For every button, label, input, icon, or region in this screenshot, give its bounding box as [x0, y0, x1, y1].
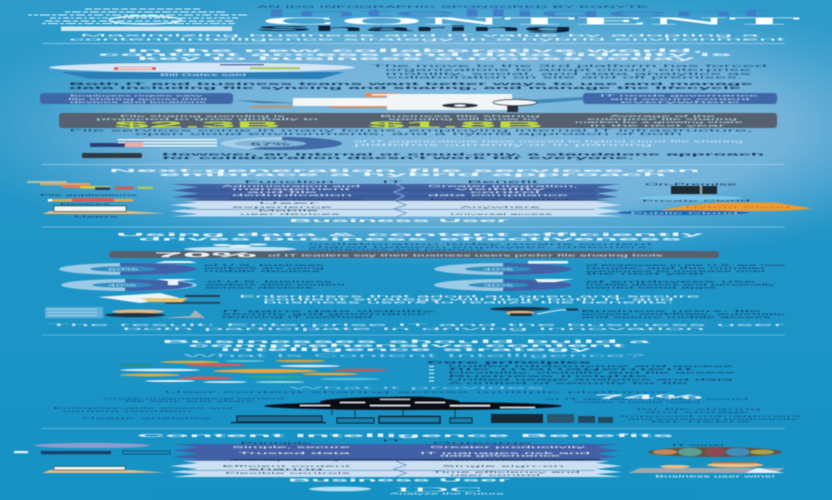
callout: left: Employees require easy [70, 94, 205, 98]
donut: 60%: workers are using [204, 266, 327, 270]
icon: private cloud: Private Cloud [642, 198, 752, 202]
heading: comprehensive content [188, 343, 629, 348]
paragraph: chart note [354, 140, 744, 147]
text block: right provides [546, 397, 803, 424]
subheading: what is content intelligence: What Is Content Intelligence? [183, 353, 649, 358]
paragraph: file services: File services come in many forms, employing internal IT infrastructure, [69, 128, 753, 132]
icon: file applications: File applications [40, 193, 139, 197]
sponsor line: AN IDG INFOGRAPHIC SPONSORED BY EGNYTE [257, 5, 651, 9]
table header: Outcome [432, 441, 535, 445]
table rows: User [258, 201, 319, 205]
donut: 60% [59, 261, 328, 275]
stat: market share text [575, 114, 746, 128]
title: Sharing: Sharing [255, 26, 575, 33]
table header [240, 438, 535, 445]
text block: right provides: of IT decision-makers would [546, 397, 751, 401]
stat: 1.8B: Business file sharing [380, 114, 543, 118]
heading: In the new collaborative world, [127, 48, 703, 53]
table rows: Transparency [230, 458, 346, 462]
stat: market share text: in the next year [590, 124, 726, 128]
paragraph: business benefit: access, workflows, automatic [581, 312, 788, 316]
heading: drives business effectiveness [138, 236, 686, 242]
text block: left provides: Enterprise-wide access and [53, 406, 236, 410]
heading: key to business success today [137, 56, 699, 61]
paragraph: enterprises [239, 294, 701, 304]
icon: devices: Devices [60, 202, 113, 206]
icon: private cloud [638, 196, 752, 202]
label: business user: Business User [288, 478, 512, 482]
heading [109, 168, 702, 177]
paragraph: both IT and business [69, 82, 753, 90]
stat: 1.8B [368, 114, 546, 130]
icon: on-premise server [645, 182, 738, 194]
icon: phone [82, 153, 142, 158]
paragraph: both IT and business: data including file syncing and sharing, and manage the lifecycle [69, 86, 741, 90]
icon: file applications [27, 181, 153, 197]
illustration: documents, gears, magnifier [233, 93, 583, 112]
table rows: visibility [455, 187, 551, 191]
icon: IT worker at monitor [45, 307, 205, 318]
table rows: experience [232, 205, 336, 209]
paragraph: chart note: platforms currently or in planning [354, 143, 653, 147]
paragraph: business benefit [581, 309, 788, 319]
paragraph: collaboration today: Collaboration today means content [308, 242, 653, 246]
paragraph: file services: open cloud environments, and a hybrid approach of both [135, 132, 683, 136]
list: core principles: Business insights [448, 374, 654, 378]
donut: 30%: of employees use [586, 280, 760, 284]
paragraph: IT benefit: IT gains data visibility, [222, 309, 440, 313]
table rows: user devices [240, 212, 344, 216]
table rows: Anywhere [460, 205, 543, 209]
paragraph: however: for collaboration doesn't work for everyone. [162, 156, 635, 160]
icon: hand with tablet (users) [42, 206, 165, 218]
table rows: management [232, 187, 352, 191]
donut: 30%: owned cloud apps [586, 286, 720, 290]
donut chart: 57% [221, 137, 342, 150]
list: core principles: Core principles [427, 360, 593, 364]
text block: right provides: choose a hybrid model [574, 400, 702, 404]
section: next generation [27, 168, 812, 223]
right illustration: business user wins: Business user wins! [655, 474, 775, 478]
text block: left provides: file sync and share [125, 399, 258, 403]
stat: 2.3B: projected to grow globally to [96, 117, 321, 121]
subtitle [69, 32, 792, 42]
text block: left provides: content retention [62, 409, 196, 413]
icon: paper and hands [98, 293, 220, 304]
paragraph: however: However, an internal or cloud-only, a standalone approach [162, 152, 764, 156]
table header: IT [382, 180, 403, 184]
subtitle: Maximizing business and IT value by adopting a [80, 32, 766, 38]
table rows: Simple, secure [232, 445, 353, 449]
table rows: Time efficiency and [432, 470, 583, 474]
table header: IT [382, 438, 404, 442]
paragraph: collaboration today [308, 242, 653, 252]
heading: Next-generation file services can [109, 168, 702, 173]
paragraph: 3rd platform [371, 64, 768, 80]
stat bar: 70%: 70% [154, 252, 259, 259]
heading: Businesses should build a [162, 339, 654, 344]
heading: content access and data fidelity is [98, 52, 736, 57]
subheading: user content sharing: User content sharing across multiple platforms [164, 390, 672, 394]
table: file services [170, 180, 622, 217]
section: using data [45, 232, 791, 331]
table header: Principle [240, 441, 314, 445]
illustration: disc with logos [49, 63, 355, 79]
heading [116, 232, 707, 242]
text block: right provides: Improved management [620, 414, 803, 418]
footer source text: Sources: IDG Research Services, IDC, Enterprise file sync and share market forecast and analysis for business [151, 494, 703, 498]
stats bar [59, 113, 777, 130]
icon: hybrid cloud: Hybrid Cloud [685, 205, 792, 209]
stat: 2.3B: File sharing spending is [120, 114, 288, 118]
text block: left provides: Usage analytics [82, 416, 217, 420]
right illustration: IT wins brain: IT wins! [672, 443, 725, 447]
table rows: Mobile [258, 208, 322, 212]
paragraph: IT benefit: security and governance, [222, 312, 433, 316]
callout: right [583, 93, 777, 104]
footer logo: IDC: Analyze the Future [390, 492, 508, 496]
table rows: and file [247, 190, 321, 194]
table rows [222, 184, 582, 216]
quote: result: both participate in driving innovation [122, 326, 705, 331]
paragraph: enterprises: Enterprises that adopt an open and secure [239, 294, 701, 298]
stat: 74%: 74% [594, 394, 705, 401]
paragraph: 3rd platform: organizations to adopt cloud, enterprise [385, 68, 752, 72]
heading [162, 339, 654, 352]
table header: Function [244, 180, 336, 184]
table rows: Universal access [450, 212, 555, 216]
donut: 30%: mobile devices and personally [586, 282, 778, 286]
paragraph: business benefit: Business users: file [581, 309, 764, 313]
callout: right: everywhere [620, 100, 744, 104]
subtitle: content intelligence strategy in a hybrid environment [69, 36, 792, 42]
callout: left: file sharing across their [68, 97, 208, 101]
donut: 60%: mobile devices [204, 269, 324, 273]
heading: Using data & content efficiently [116, 232, 707, 237]
list: core principles [427, 360, 740, 385]
right illustration: business user wins [628, 462, 785, 478]
list: core principles: A unified of security for file [448, 381, 692, 385]
stat: 1.8B: $1.8B [368, 120, 546, 130]
icon: public cloud: Public Cloud [630, 211, 741, 215]
stat: market share text: enterprise file sharing [587, 117, 740, 121]
stat bar: 70%: of IT leaders say their business users prefer file sharing tools [268, 254, 664, 258]
callout: right: and secure content [610, 97, 751, 101]
donut: 40%: the next year [586, 272, 707, 276]
label: business user: Business User [289, 218, 511, 223]
right illustration: IT wins brain [648, 443, 782, 457]
donut: 40% US business: of U.S. business [207, 280, 336, 284]
table rows: Trusted data [238, 451, 354, 455]
icon: devices [48, 198, 133, 206]
donut: 40%: continues to increase over [586, 269, 767, 273]
header [28, 5, 801, 42]
donut: 40% US business [61, 279, 346, 291]
table rows: IT manages risk and [420, 451, 593, 455]
illustration: black cloud with devices [231, 396, 613, 423]
table rows: deduplication [232, 193, 356, 197]
table rows: data governance [440, 454, 563, 458]
heading: Content Intelligence Benefits [137, 433, 677, 439]
paragraph: business benefit: and secure mobile access [581, 315, 774, 319]
quote: result [48, 322, 791, 331]
donut: 40% US business: 40% [108, 284, 137, 288]
donut: 60%: 60% [108, 268, 139, 272]
left icons: IT [14, 443, 170, 454]
icon: server bars [90, 139, 217, 147]
paragraph: file services [69, 128, 753, 136]
donut: 30% [434, 279, 778, 291]
table rows: Greater integration, [428, 184, 580, 188]
section: benefits [14, 433, 785, 482]
paragraph: IT benefit [222, 309, 440, 319]
left icon: hand with tablet [42, 466, 165, 473]
table rows: control [470, 190, 543, 194]
paragraph: collaboration today: shared between employees, customers, [308, 245, 653, 249]
illustration: disc with logos: Bill Gates said [160, 73, 247, 77]
footer logo: IDC: IDC [395, 488, 483, 494]
text block: left provides [53, 396, 285, 420]
paragraph: chart note: of IT organizations have moved to hybrid cloud file sharing [354, 140, 744, 144]
title: CONTENT: CONTENT [260, 16, 801, 28]
list: core principles: file management [448, 367, 696, 371]
paragraph: 3rd platform: The move to the 3rd platform has forced [371, 64, 768, 68]
list: core principles: Flexibility, visibility and file access [448, 370, 740, 374]
donut: 40%: of employees in the U.S. are now [586, 263, 786, 267]
icon: business user running [490, 307, 578, 316]
text block: right provides: for users [650, 420, 757, 424]
icon: on-premise server: On-Premise [645, 182, 738, 186]
table rows: Single sign-on [442, 464, 568, 468]
list: core principles: Unified infrastructure and access [448, 364, 738, 368]
table rows: sharing [248, 467, 327, 471]
heading: intelligence strategy [220, 347, 595, 352]
stat: market share text: Average of the [610, 114, 718, 118]
paragraph: enterprises: content strategy will help both IT and [263, 298, 675, 302]
illustration: colored swirl [117, 360, 388, 383]
section: file services [69, 128, 764, 160]
stat: 2.3B [96, 114, 321, 130]
stat bar: 70% [109, 251, 719, 259]
heading: embrace a hybrid approach [159, 172, 668, 177]
icon: hybrid cloud [660, 202, 812, 211]
table rows: business continuity [430, 198, 582, 202]
heading [98, 48, 736, 61]
icon: hand with tablet (users): Users [74, 214, 121, 218]
stat: 2.3B: $2.3B [114, 120, 283, 130]
table rows: Content protection [230, 198, 368, 202]
table rows: Greater productivity [430, 445, 589, 449]
paragraph: both IT and business: Both IT and business teams want better ways to use and manage [69, 82, 753, 86]
donut: 40% US business: across devices [205, 286, 317, 290]
table rows: Efficient content [222, 464, 352, 468]
table rows: Flexible controls [225, 471, 354, 475]
icon: circuit brain cloud [28, 9, 250, 31]
subheading: what it provides: What it provides [289, 385, 544, 390]
stat: market share text: market by a growing share [575, 120, 746, 124]
paragraph: collaboration today: contractors and partners. [308, 248, 489, 252]
table rows: data compliance [428, 193, 572, 197]
paragraph: 3rd platform: collaboration on site and off premises. [387, 76, 743, 80]
donut: 30%: 30% [483, 284, 514, 288]
quote: result: The result: Enterprise IT and the business user [48, 322, 791, 327]
stat: 1.8B: spending will grow to [388, 117, 538, 121]
section: collaborative world [40, 48, 777, 112]
callout: left [40, 93, 233, 104]
title: Intelligent: Intelligent [260, 8, 773, 20]
donut: 40%: remote, and this number [586, 266, 767, 270]
donut: 40% US business: workers store content [205, 282, 346, 286]
section: strategy [53, 339, 803, 424]
paragraph: enterprises: business users to realize the benefits: [263, 300, 675, 304]
donut: 40%: 40% [483, 268, 514, 272]
text block: right provides: and storage [645, 410, 754, 414]
icon: molecules cloud [184, 244, 296, 251]
paragraph: 3rd platform: mobility, social, and data analytics as [385, 72, 753, 76]
table rows: user control [450, 473, 543, 477]
callout: left: devices and locations [70, 100, 209, 104]
table: benefits [170, 438, 622, 477]
callout: right: IT needs governance [600, 94, 761, 98]
table header [244, 180, 539, 184]
table rows: Use of infrastructure [415, 458, 589, 462]
text block: left provides: Cross-organizational content [103, 396, 285, 400]
donut: 40% [434, 261, 786, 276]
paragraph: IT benefit: reducing IT overhead [222, 315, 374, 319]
donut chart: 57%: 57% [250, 142, 290, 146]
table header: Benefit [467, 180, 539, 184]
donut: 60%: of U.S. business [204, 263, 328, 267]
table rows [222, 445, 593, 477]
table rows: Administration and [222, 184, 363, 188]
icon: public cloud [617, 210, 749, 215]
text block: right provides: for file sharing [636, 407, 765, 411]
footer logo: IDC [309, 487, 508, 496]
text block: right provides: and increased productivity [628, 417, 802, 421]
list: core principles: Unified usage analytics and data [448, 378, 737, 382]
paragraph: however [162, 152, 764, 160]
